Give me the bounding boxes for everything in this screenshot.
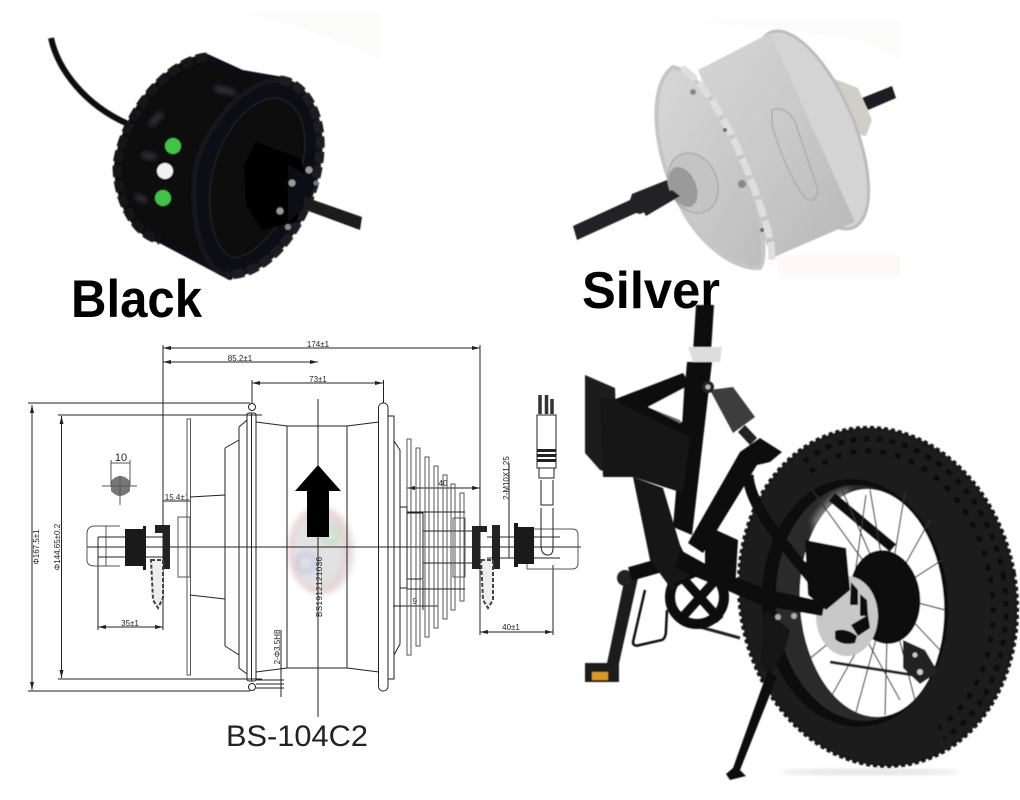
rim (754, 473, 956, 733)
rocker arm (688, 438, 782, 553)
panel: silver motor photo (573, 16, 900, 278)
motor body (698, 33, 855, 258)
dimension texts: 2-M10X1.25 (502, 456, 511, 500)
kickstand mount (760, 610, 790, 675)
dimension texts: Φ144.65±0.2 (53, 523, 62, 570)
arrow (295, 465, 341, 537)
label: Silver: Silver (582, 262, 720, 320)
chain (700, 627, 913, 675)
dimension texts: Φ167.5±1 (32, 529, 41, 565)
panel: technical drawing (28, 340, 581, 753)
dimension texts (32, 340, 520, 664)
rear shock (710, 387, 755, 433)
dimension texts: 35±1 (121, 619, 139, 628)
panel: folding bike rear photo (585, 305, 1020, 788)
cable (51, 38, 128, 124)
dimension texts: 10 (115, 452, 127, 464)
battery block (600, 397, 690, 493)
right axle assembly (472, 480, 578, 608)
dimension texts: 85.2±1 (228, 354, 253, 363)
kickstand (726, 670, 777, 780)
motor outline (178, 403, 400, 691)
dimension lines (28, 345, 553, 697)
dimension texts: 40 (439, 479, 448, 488)
boss (659, 145, 727, 221)
front flange (194, 80, 320, 275)
chainring (670, 570, 724, 624)
dimension texts: 9 (413, 597, 418, 606)
spokes (800, 490, 945, 715)
main frame tube (585, 375, 618, 475)
seat post (693, 305, 714, 352)
folding stand loop (633, 590, 667, 646)
rear stay behind wheel (832, 497, 893, 548)
logo outline (772, 109, 818, 200)
axle section 10 (102, 460, 137, 505)
hub motor (844, 546, 926, 648)
model label: BS-104C2 (226, 720, 368, 753)
panel: black motor photo (51, 12, 380, 277)
dimension texts: 15.4±1 (165, 493, 190, 502)
pedal (585, 663, 619, 682)
dimension texts: BS1912121036 (315, 556, 324, 617)
right hub (832, 78, 872, 136)
rear fender stay (748, 475, 822, 592)
left axle assembly (87, 525, 170, 608)
connector plug (537, 395, 556, 478)
label: Black: Black (71, 270, 202, 329)
labels on motor (165, 138, 181, 154)
rear wheel tire (736, 425, 1020, 769)
dimension texts: 2-Φ3.5H8 (273, 629, 282, 664)
right axle (862, 86, 896, 110)
ground shadow (780, 769, 960, 775)
dimension texts: 174±1 (307, 340, 330, 349)
centre lines (87, 399, 581, 717)
caliper and derailleur (805, 540, 850, 610)
down tube (633, 477, 695, 590)
right flange (732, 16, 892, 244)
disc rotor (816, 576, 878, 656)
dimension texts: 73±1 (309, 375, 327, 384)
hub and axle (244, 142, 310, 230)
motor body (117, 57, 283, 277)
pedal crank (606, 577, 638, 668)
left flange and face (656, 67, 764, 268)
dimension texts: 40±1 (502, 623, 520, 632)
chainstay (675, 550, 825, 616)
left axle (573, 178, 680, 240)
seat tube (673, 362, 712, 535)
cassette (400, 439, 472, 655)
watermark logo (290, 507, 354, 595)
frame triangle (613, 373, 692, 440)
